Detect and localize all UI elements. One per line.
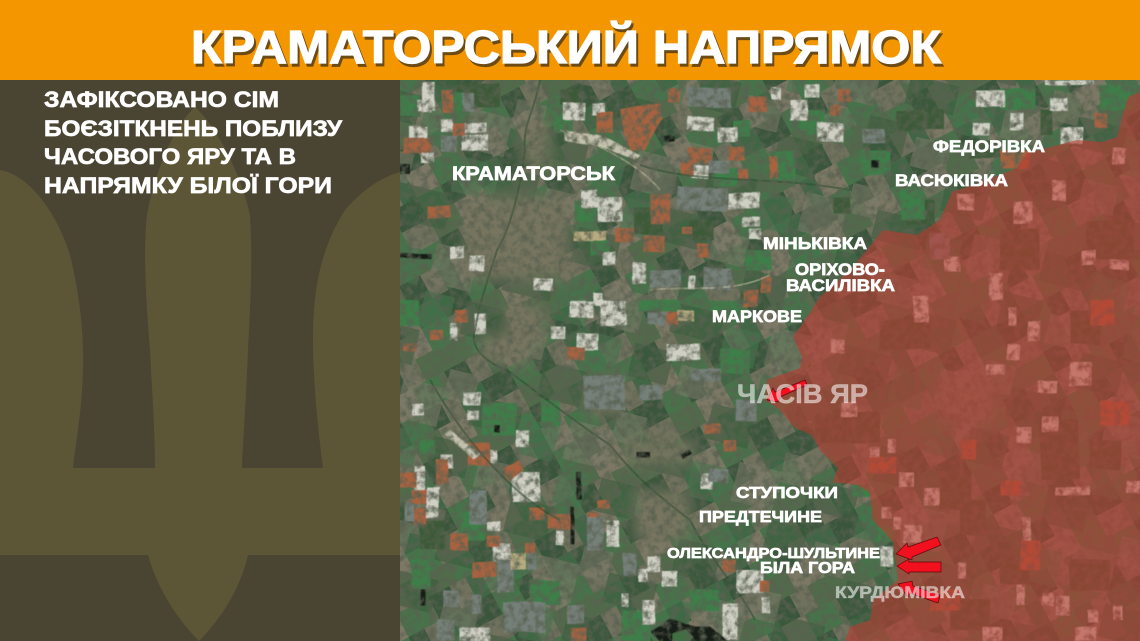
arrow: Oleksandro-Shultyne [896, 537, 941, 560]
label: Kurdiumivka: КУРДЮМІВКА [835, 583, 965, 602]
panel: left sidebar [0, 80, 400, 641]
text block: summary: НАПРЯМКУ БІЛОЇ ГОРИ [44, 173, 332, 198]
label: Orikhovo-Vasylivka [786, 260, 895, 295]
label: Stupochky: СТУПОЧКИ [736, 485, 838, 502]
mottled texture [400, 80, 1140, 641]
header band [0, 0, 1140, 80]
red occupied zone [765, 92, 1140, 641]
label: Orikhovo-Vasylivka: ОРІХОВО- [795, 260, 885, 279]
text block: summary [44, 87, 342, 198]
label: Kramatorsk: КРАМАТОРСЬК [452, 164, 615, 185]
icon: trident emblem [0, 107, 400, 641]
title: КРАМАТОРСЬКИЙ НАПРЯМОК [191, 21, 942, 73]
label: Minkivka: МІНЬКІВКА [763, 234, 867, 253]
arrow: Kurdiumivka [898, 581, 940, 603]
label: Oleksandro-Shultyne: ОЛЕКСАНДРО-ШУЛЬТИНЕ [667, 545, 880, 562]
label: Bila Hora: БІЛА ГОРА [760, 560, 855, 577]
label: Fedorivka: ФЕДОРІВКА [933, 137, 1045, 156]
label: Markove: МАРКОВЕ [712, 307, 802, 326]
text block: summary: БОЄЗІТКНЕНЬ ПОБЛИЗУ [44, 116, 342, 141]
rivers and ravines [430, 80, 850, 620]
arrow: Chasiv Yar [767, 380, 807, 402]
text block: summary: ЗАФІКСОВАНО СІМ [44, 87, 279, 112]
map: satellite view [400, 80, 1140, 641]
label: Vasiukivka: ВАСЮКІВКА [895, 171, 1008, 190]
text block: summary: ЧАСОВОГО ЯРУ ТА В [44, 144, 296, 169]
label: Orikhovo-Vasylivka: ВАСИЛІВКА [786, 276, 895, 295]
label: Chasiv Yar: ЧАСІВ ЯР [737, 379, 868, 409]
label: Predtechyne: ПРЕДТЕЧИНЕ [699, 509, 822, 526]
arrow: Bila Hora [897, 559, 941, 574]
map labels [452, 137, 1045, 577]
